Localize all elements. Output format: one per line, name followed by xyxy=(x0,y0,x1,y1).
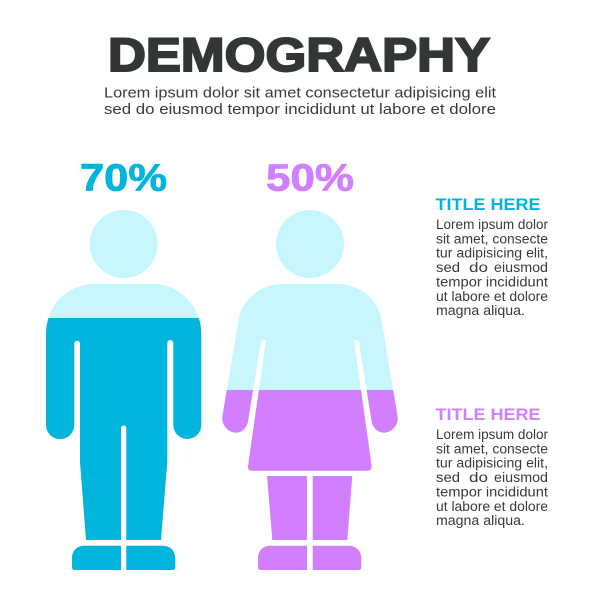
panel: purple text block xyxy=(436,406,549,528)
male percentage: 70%: 70% xyxy=(80,158,167,200)
body text: blue block: sed xyxy=(436,260,460,275)
body text: purple block: Lorem ipsum dolor xyxy=(436,427,549,442)
body text: purple block: sed xyxy=(436,470,460,485)
panel: blue text block xyxy=(436,196,549,318)
body text: blue block: magna aliqua. xyxy=(436,303,525,318)
title: DEMOGRAPHY xyxy=(108,28,490,81)
heading: purple title: TITLE HERE xyxy=(436,406,540,424)
body text: blue block xyxy=(436,217,549,318)
body text: purple block: eiusmod xyxy=(494,470,548,485)
subtitle text block: sed do eiusmod tempor incididunt ut labore et dolore xyxy=(104,101,496,118)
body text: purple block: magna aliqua. xyxy=(436,513,525,528)
body text: blue block: tur adipisicing elit, xyxy=(436,246,548,261)
body text: blue block: sit amet, consecte xyxy=(436,231,548,246)
heading: blue title: TITLE HERE xyxy=(436,196,540,214)
body text: blue block: eiusmod xyxy=(494,260,548,275)
body text: purple block xyxy=(436,427,549,528)
body text: purple block: tur adipisicing elit, xyxy=(436,456,548,471)
body text: blue block: tempor incididunt xyxy=(436,274,548,290)
body text: purple block: do xyxy=(469,470,488,485)
body text: blue block: Lorem ipsum dolor xyxy=(436,217,549,232)
female percentage: 50%: 50% xyxy=(266,158,354,200)
body text: blue block: do xyxy=(469,260,488,275)
body text: purple block: sit amet, consecte xyxy=(436,441,548,456)
icon: female figure filled to 50% xyxy=(222,210,398,570)
subtitle text block: Lorem ipsum dolor sit amet consectetur adipisicing elit xyxy=(104,84,497,102)
body text: blue block: ut labore et dolore xyxy=(436,289,548,304)
body text: purple block: tempor incididunt xyxy=(436,484,548,500)
icon: male figure filled to 70% xyxy=(46,210,201,570)
body text: purple block: ut labore et dolore xyxy=(436,499,548,514)
subtitle text block xyxy=(104,84,497,118)
